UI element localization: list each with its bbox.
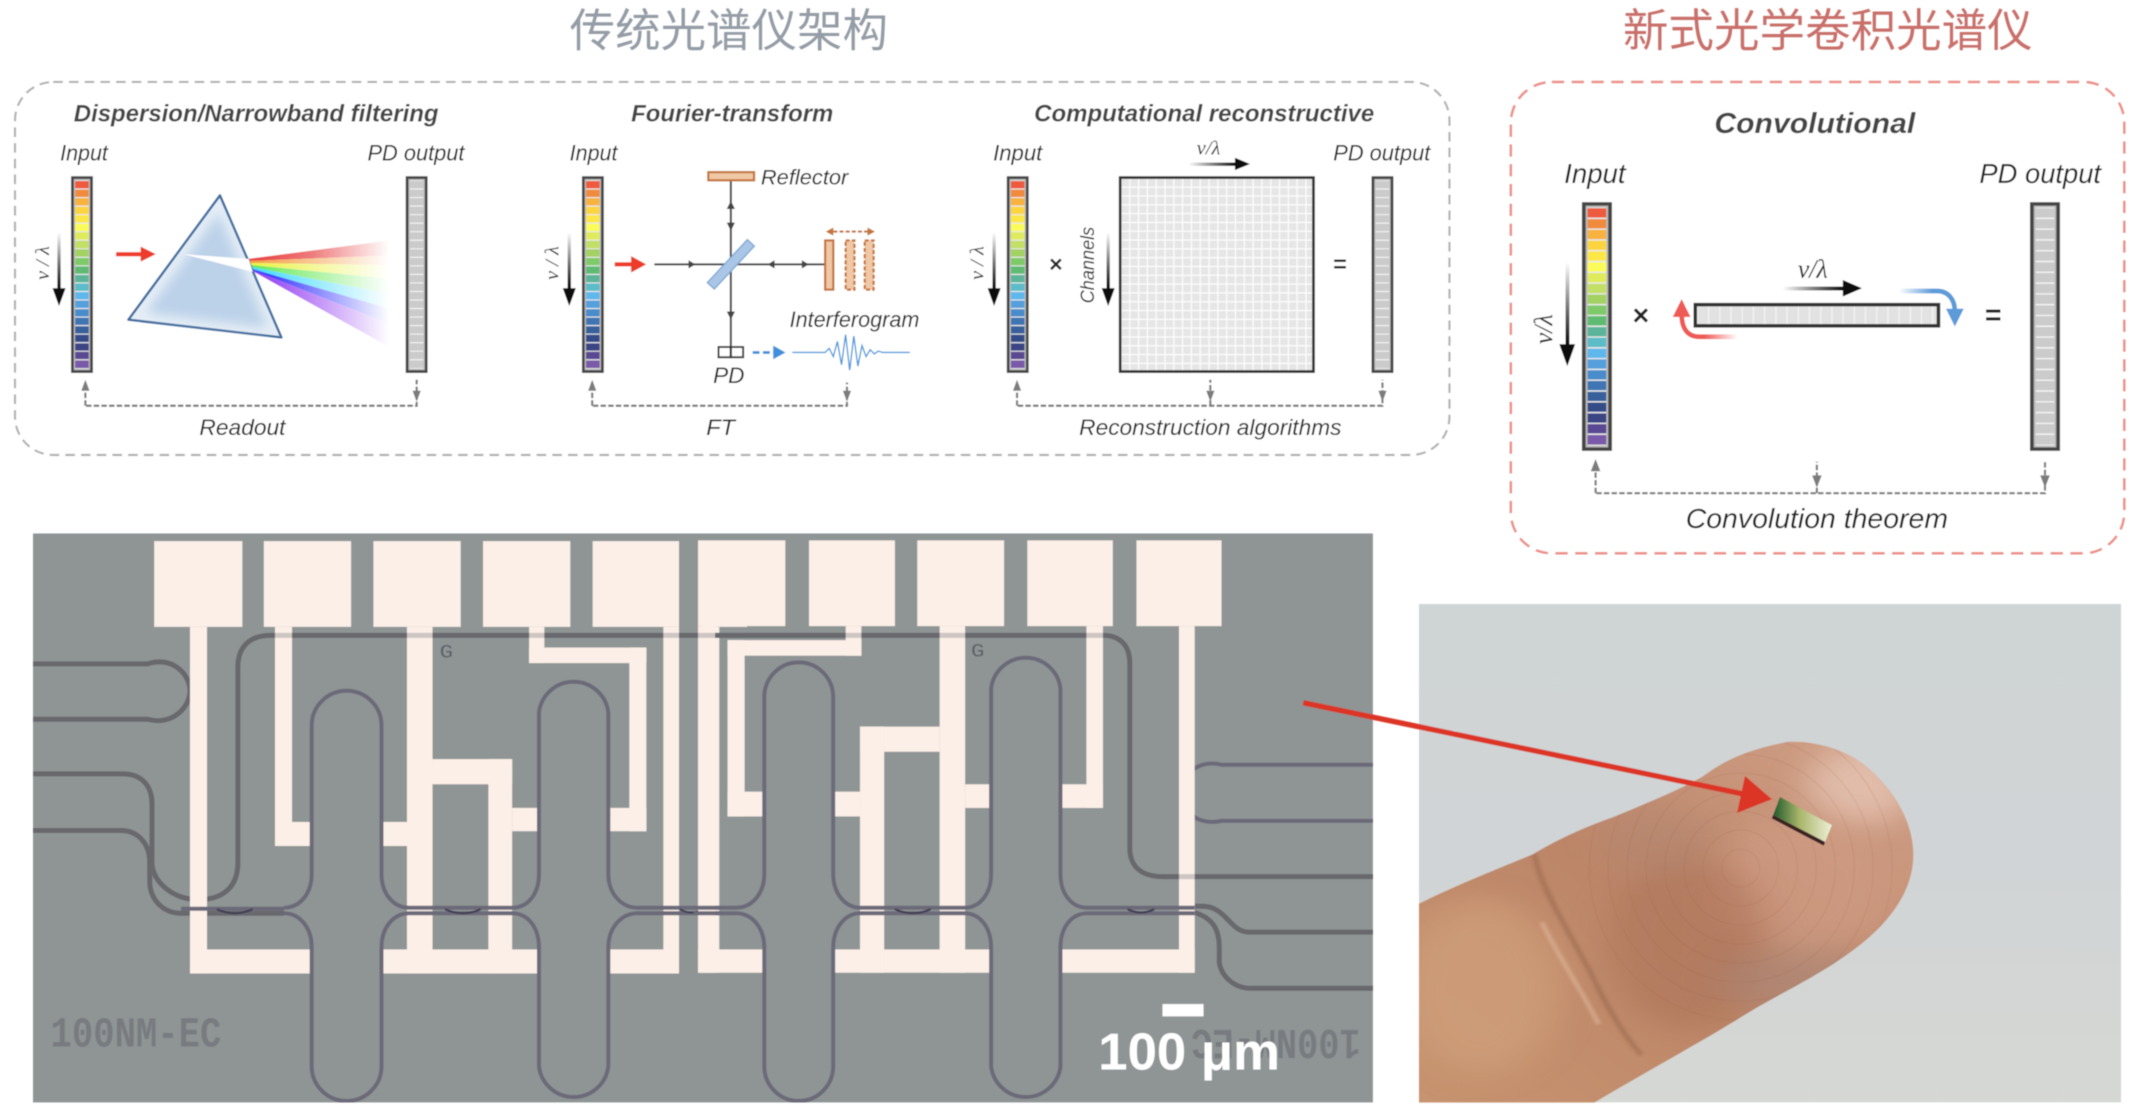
input spectrum bar bbox=[72, 178, 92, 372]
metal pads (right) bbox=[698, 540, 1222, 626]
input spectrum bar bbox=[583, 178, 602, 372]
label: input: Input bbox=[1564, 158, 1627, 189]
metal pads (left) bbox=[154, 541, 747, 627]
sub-panel: computational reconstructive bbox=[967, 101, 1432, 440]
photo: chip on fingertip bbox=[1400, 604, 2121, 1106]
right half of chip bbox=[694, 540, 1374, 1101]
scale label: 100 μm bbox=[1098, 1024, 1280, 1082]
readout dashed loop bbox=[81, 380, 421, 406]
multiply sign: × bbox=[1632, 300, 1649, 332]
matrix axis label: ν/λ bbox=[1197, 137, 1220, 159]
panel: traditional architectures bbox=[15, 82, 1449, 455]
panel: convolutional bbox=[1511, 82, 2124, 553]
photo: chip micrograph bbox=[33, 533, 1374, 1102]
input spectrum bar bbox=[1008, 178, 1027, 372]
multiply sign: × bbox=[1049, 251, 1063, 277]
racetrack waveguides (left) bbox=[181, 682, 722, 1101]
interferometer beam paths bbox=[654, 179, 825, 357]
convolution filter bar bbox=[1695, 305, 1938, 326]
channels arrow bbox=[1102, 232, 1115, 306]
label: input: Input bbox=[993, 141, 1044, 166]
red input arrow bbox=[615, 256, 646, 273]
label: PD output: PD output bbox=[1333, 141, 1432, 166]
tiny chip bbox=[1772, 797, 1832, 846]
finger crease bbox=[1535, 854, 1641, 1055]
die label right (rotated): 100NM-EC bbox=[1191, 1017, 1361, 1065]
label: PD: PD bbox=[713, 363, 745, 388]
waveguides under metal (right) bbox=[698, 635, 1374, 877]
axis arrow v/lambda bbox=[988, 232, 1001, 306]
mark G (right): G bbox=[971, 642, 984, 663]
reconstruction dashed loop bbox=[1013, 380, 1387, 406]
ghost bus over metal (right) bbox=[698, 635, 1195, 877]
racetrack interiors (right) bbox=[764, 658, 1060, 1101]
equals sign: = bbox=[1985, 299, 2002, 331]
racetrack interiors (left) bbox=[312, 682, 608, 1101]
axis arrow v/lambda bbox=[53, 232, 66, 306]
heading: dispersion: Dispersion/Narrowband filtering bbox=[74, 101, 439, 128]
red hooked arrow bbox=[1673, 299, 1738, 337]
top axis label: ν/λ bbox=[1798, 254, 1828, 283]
ghost bus over metal (left) bbox=[271, 633, 722, 638]
arrow: micrograph to fingertip chip bbox=[1303, 703, 1772, 813]
PD output bar bbox=[407, 178, 426, 372]
axis arrow v/lambda bbox=[1559, 262, 1575, 366]
red input arrow bbox=[116, 247, 156, 262]
metal traces (left) bbox=[190, 627, 719, 973]
beam splitter bbox=[707, 240, 754, 289]
title: traditional spectrometer architecture: 传统光谱仪架构 bbox=[570, 5, 888, 56]
convolution dashed loop bbox=[1591, 459, 2050, 493]
FT dashed loop bbox=[588, 380, 851, 406]
coupler wiggles (right) bbox=[895, 909, 1154, 913]
heading: convolutional: Convolutional bbox=[1714, 108, 1916, 140]
label: input: Input bbox=[570, 141, 619, 166]
fingerprint ridges bbox=[1813, 756, 1882, 820]
label: PD output: PD output bbox=[367, 141, 466, 166]
sub-panel: dispersion / narrowband filtering bbox=[32, 101, 466, 440]
moving mirrors bbox=[825, 227, 875, 290]
label: readout: Readout bbox=[199, 415, 287, 440]
equals sign: = bbox=[1333, 251, 1347, 277]
rainbow dispersed beams bbox=[249, 240, 389, 347]
blue dashed arrow bbox=[753, 346, 785, 359]
reflector bbox=[708, 172, 754, 180]
label: input: Input bbox=[60, 141, 110, 166]
matrix bbox=[1120, 178, 1313, 372]
coupler wiggles (left) bbox=[217, 909, 702, 913]
label: channels: Channels bbox=[1077, 227, 1099, 303]
interferogram waveform bbox=[792, 335, 910, 370]
PD output bar bbox=[1373, 178, 1392, 372]
label: convolution theorem: Convolution theorem bbox=[1686, 503, 1948, 534]
fingertip bbox=[1418, 741, 1914, 1104]
axis label: ν / λ bbox=[542, 246, 564, 280]
title: new optical convolutional spectrometer: 新式光学卷积光谱仪 bbox=[1623, 5, 2033, 56]
axis arrow v/lambda bbox=[563, 232, 576, 306]
prism bbox=[128, 195, 281, 337]
label: reflector: Reflector bbox=[761, 166, 849, 189]
input spectrum bar bbox=[1584, 204, 1610, 449]
blue hooked arrow bbox=[1899, 291, 1964, 327]
label: reconstruction algorithms: Reconstruction algorithms bbox=[1079, 415, 1341, 440]
die label left: 100NM-EC bbox=[51, 1011, 221, 1059]
axis label: ν/λ bbox=[1529, 314, 1558, 344]
sub-panel: Fourier-transform bbox=[542, 101, 919, 440]
heading: computational reconstructive: Computational reconstructive bbox=[1034, 101, 1374, 128]
heading: Fourier-transform: Fourier-transform bbox=[631, 101, 833, 128]
axis label: ν / λ bbox=[32, 246, 54, 280]
axis label: ν / λ bbox=[967, 246, 989, 280]
scale bar bbox=[1163, 1004, 1204, 1016]
waveguides under metal (left) bbox=[33, 662, 190, 721]
label: interferogram: Interferogram bbox=[790, 307, 919, 332]
racetrack waveguides (right) bbox=[694, 658, 1195, 1101]
PD output bar bbox=[2032, 204, 2058, 449]
label: FT: FT bbox=[706, 415, 737, 440]
top axis arrow bbox=[1783, 280, 1862, 296]
mark G (left): G bbox=[440, 643, 453, 664]
label: PD output: PD output bbox=[1979, 158, 2102, 189]
photodetector bbox=[719, 347, 743, 357]
left half of chip bbox=[33, 541, 747, 1101]
matrix axis arrow bbox=[1188, 158, 1250, 170]
metal traces (right) bbox=[698, 626, 1195, 973]
